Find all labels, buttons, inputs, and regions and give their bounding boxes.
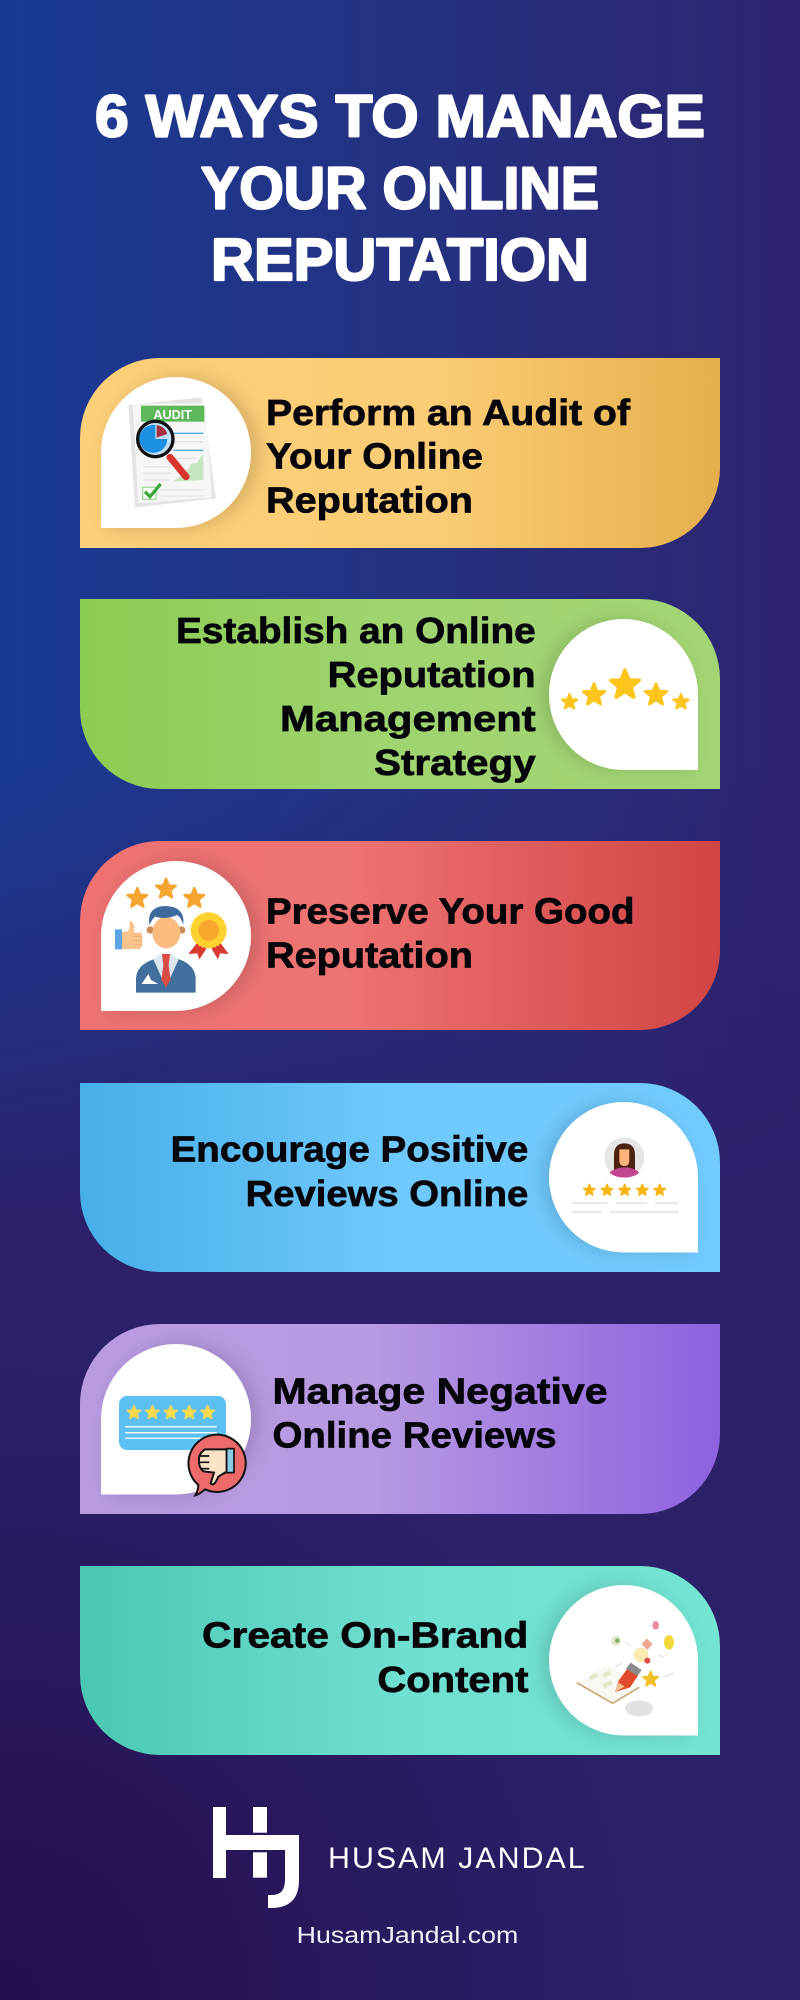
title: YOUR ONLINE xyxy=(201,156,599,222)
title xyxy=(95,84,705,293)
brand name: HUSAM JANDAL xyxy=(328,1842,587,1875)
text: manage negative reviews: Online Reviews xyxy=(272,1414,556,1456)
text: on-brand content: Content xyxy=(377,1659,528,1700)
icon holder: white drop xyxy=(101,377,251,528)
text: perform an audit: Reputation xyxy=(266,480,473,520)
icon holder: white drop xyxy=(101,1344,251,1494)
text: preserve good reputation: Reputation xyxy=(266,934,473,976)
panel: preserve good reputation xyxy=(80,841,720,1030)
text: encourage positive reviews xyxy=(171,1128,528,1214)
icon: pencil on notebook with ideas xyxy=(577,1621,674,1716)
text: preserve good reputation: Preserve Your Good xyxy=(266,890,634,932)
icon: reviewer with five stars xyxy=(572,1137,678,1212)
icon: audit document: AUDIT xyxy=(153,408,192,422)
text: encourage positive reviews: Encourage Positive xyxy=(171,1128,528,1170)
panel: online reputation management strategy xyxy=(80,599,720,789)
icon: businessman with stars and medal xyxy=(115,879,229,993)
footer logo: HJ mark xyxy=(213,1807,299,1908)
panel: encourage positive reviews xyxy=(80,1083,720,1272)
text: perform an audit: Your Online xyxy=(266,436,483,476)
icon: review card with thumbs down xyxy=(119,1396,246,1495)
text: preserve good reputation xyxy=(266,890,634,976)
text: on-brand content: Create On-Brand xyxy=(202,1614,528,1656)
panel: on-brand content xyxy=(80,1566,720,1755)
text: manage negative reviews xyxy=(272,1370,608,1456)
title: 6 WAYS TO MANAGE xyxy=(95,84,705,150)
text: on-brand content xyxy=(202,1614,528,1700)
text: online reputation management strategy: Strategy xyxy=(374,742,536,783)
text: manage negative reviews: Manage Negative xyxy=(272,1370,608,1412)
icon holder: white drop xyxy=(549,1102,698,1253)
text: encourage positive reviews: Reviews Online xyxy=(246,1173,528,1214)
panel: perform an audit xyxy=(80,358,720,548)
text: online reputation management strategy: Management xyxy=(280,698,536,739)
icon holder: white drop xyxy=(549,1585,698,1736)
panel: manage negative reviews xyxy=(80,1324,720,1514)
text: online reputation management strategy xyxy=(176,610,536,783)
text: online reputation management strategy: Establish an Online xyxy=(176,610,536,651)
title: REPUTATION xyxy=(211,227,589,293)
text: perform an audit xyxy=(266,392,631,520)
text: online reputation management strategy: Reputation xyxy=(328,654,536,695)
text: perform an audit: Perform an Audit of xyxy=(266,392,631,433)
icon holder: white drop xyxy=(101,861,251,1011)
icon: audit document xyxy=(128,397,216,507)
icon: five stars xyxy=(562,670,689,709)
website url: HusamJandal.com xyxy=(297,1922,518,1948)
icon holder: white drop xyxy=(549,619,698,770)
